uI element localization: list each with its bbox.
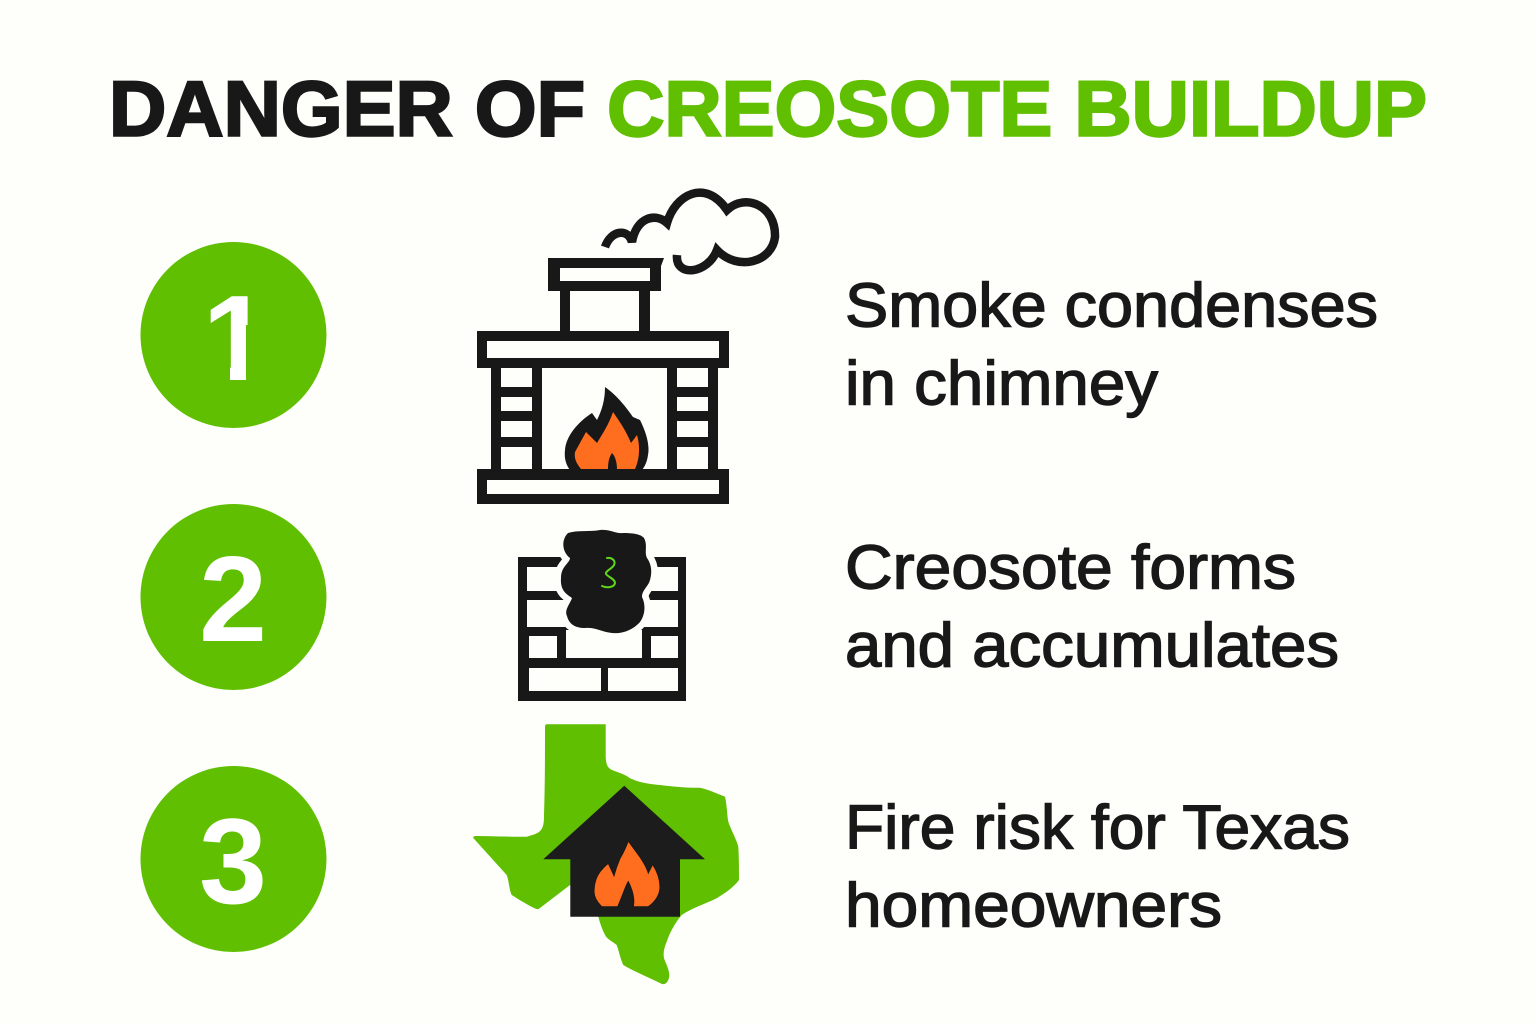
step 2 text: and accumulates xyxy=(845,610,1339,680)
smoke cloud xyxy=(605,193,775,270)
step 2 text xyxy=(845,532,1339,680)
step 1 text xyxy=(845,270,1378,418)
step 2 number badge: 2 xyxy=(199,531,267,667)
step 3 text: Fire risk for Texas xyxy=(845,792,1350,862)
step 3 text xyxy=(845,792,1350,940)
flame xyxy=(594,841,660,907)
Texas map xyxy=(473,724,739,984)
left brick column xyxy=(491,368,542,469)
brick wall xyxy=(518,557,686,701)
step 2 number badge xyxy=(140,504,326,690)
right brick column xyxy=(667,368,718,469)
step 1 text: in chimney xyxy=(845,348,1159,418)
step 1 number badge: 1 xyxy=(202,270,270,406)
mantel xyxy=(477,331,729,368)
step 3 number badge xyxy=(140,766,326,952)
icon: house on fire over Texas map xyxy=(473,724,739,984)
icon: fireplace with chimney smoke xyxy=(477,193,775,504)
step 2 text: Creosote forms xyxy=(845,532,1296,602)
step 3 text: homeowners xyxy=(845,870,1222,940)
icon: creosote blob on brick flue xyxy=(518,530,686,701)
house xyxy=(543,786,705,917)
step 1 text: Smoke condenses xyxy=(845,270,1378,340)
green wisp xyxy=(602,558,615,587)
step 3 number badge: 3 xyxy=(199,793,267,929)
chimney cap and stack xyxy=(548,258,664,331)
title: DANGER OF CREOSOTE BUILDUP xyxy=(109,64,1427,152)
creosote blob xyxy=(561,530,651,633)
hearth base xyxy=(477,469,729,504)
step 1 number badge xyxy=(140,242,326,428)
flame xyxy=(565,387,649,470)
